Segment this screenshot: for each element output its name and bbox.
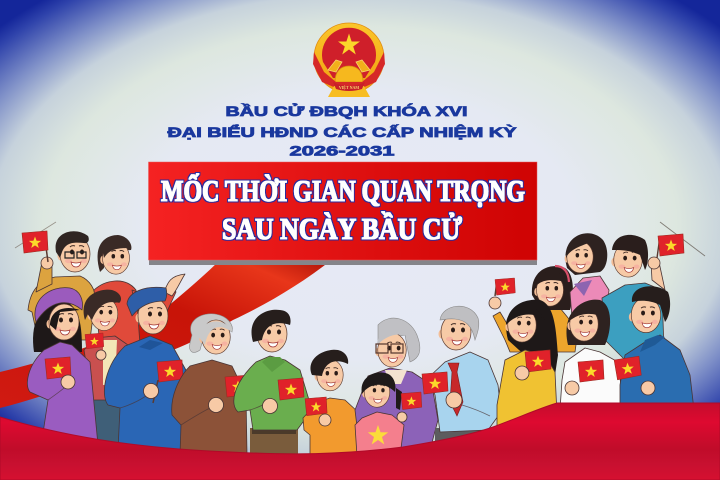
heading: election subtitle [168,104,516,158]
bottom red ribbon [0,403,720,480]
title text [161,172,525,246]
title text: SAU NGÀY BẦU CỬ [222,210,462,246]
emblem scroll [328,86,370,97]
heading: election subtitle: 2026-2031 [290,144,395,158]
person: grandmother with glasses in purple [355,318,438,452]
emblem star [338,34,360,54]
person: boy in orange [303,350,358,456]
title text: MỐC THỜI GIAN QUAN TRỌNG [161,172,525,208]
emblem gear [335,66,363,82]
red swoosh ribbon [0,258,334,408]
person: woman in white shirt [560,300,624,410]
emblem wheat [328,60,370,72]
heading: election subtitle: BẦU CỬ ĐBQH KHÓA XVI [226,104,468,119]
person: man in teal [602,222,705,360]
person: man with glasses [15,222,95,340]
title banner [148,162,537,265]
national emblem [313,23,385,97]
person: woman in pink [565,233,609,318]
person: girl with headband and raised flag [489,266,578,352]
heading: election subtitle: ĐẠI BIỂU HĐND CÁC CẤP NHIỆM KỲ [168,125,516,140]
person: man in green shirt [234,310,312,458]
person: man in blue shirt [614,286,694,410]
emblem ribbon [313,52,385,88]
person: woman in purple ao dai [27,288,98,445]
person: woman in red [94,235,185,345]
national emblem: VIỆT NAM [339,85,359,90]
person: little girl in pink [355,372,422,456]
person: girl with small flag [84,290,128,450]
person: grandmother in brown [172,314,251,455]
person: woman in yellow ao dai [497,300,558,435]
person: grandfather with red tie [422,306,501,452]
person: man in blue ao dai [104,287,187,450]
